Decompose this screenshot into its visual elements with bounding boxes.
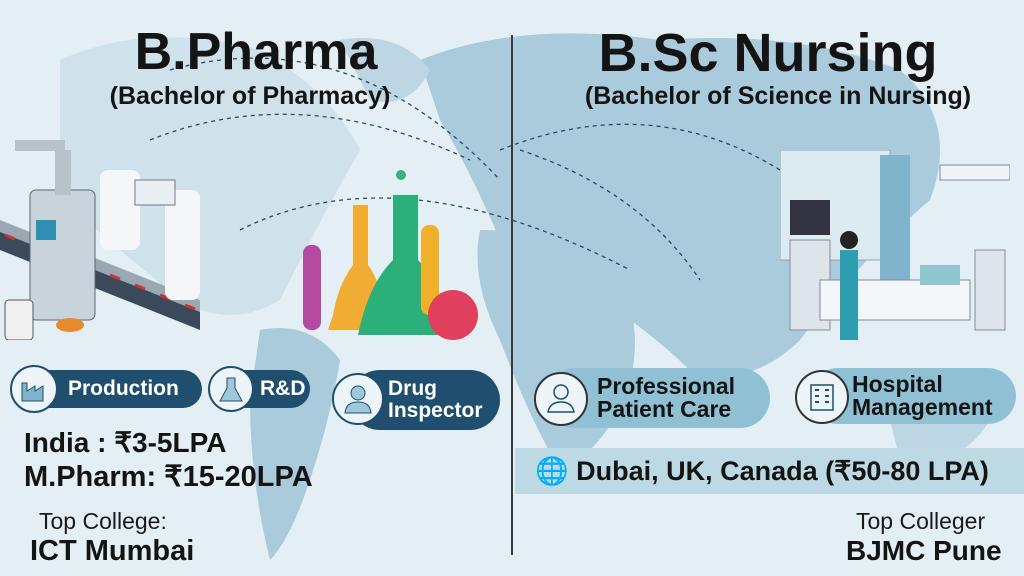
pill: Production [26,370,202,408]
pill: Professional Patient Care [545,368,770,428]
title: B.Sc Nursing: B.Sc Nursing [598,23,938,83]
salary: India: India : ₹3-5LPA [24,427,226,458]
top college: ICT Mumbai: ICT Mumbai [30,535,194,567]
illustration: hospital room [780,150,1010,340]
top college label right: Top Colleger [856,508,985,534]
pill: R&D [222,370,310,408]
illustration: lab flasks [303,170,478,340]
pill: Production: Production [68,377,179,400]
top college: BJMC Pune: BJMC Pune [846,535,1002,566]
banner: Dubai UK Canada: 🌐 Dubai, UK, Canada (₹50-80 LPA) [535,456,989,486]
icon: factory [10,365,58,413]
illustration: pharma factory [0,140,200,340]
pill: Drug Inspector: Inspector [388,399,483,422]
pill: R&D: R&D [260,377,306,400]
pill: Drug Inspector [350,370,500,430]
icon: hospital [795,370,849,424]
top college label: Top College: [39,508,167,534]
divider [511,35,513,555]
banner: Dubai UK Canada [515,448,1024,494]
icon: nurse [534,372,588,426]
salary: M.Pharm: M.Pharm: ₹15-20LPA [24,461,313,493]
pill: Professional Patient Care: Patient Care [597,396,731,422]
title: B.Pharma: B.Pharma [135,23,377,81]
subtitle: Bachelor of Pharmacy: (Bachelor of Pharmacy) [110,82,390,110]
pill: Professional Patient Care: Professional [597,373,735,399]
pill: Hospital Management [810,368,1016,424]
pill: Hospital Management: Management [852,394,993,420]
pill: Hospital Management: Hospital [852,371,943,397]
subtitle: Bachelor of Science in Nursing: (Bachelor of Science in Nursing) [585,82,971,110]
icon: flask [208,366,254,412]
icon: inspector [332,373,384,425]
pill: Drug Inspector: Drug [388,377,437,400]
